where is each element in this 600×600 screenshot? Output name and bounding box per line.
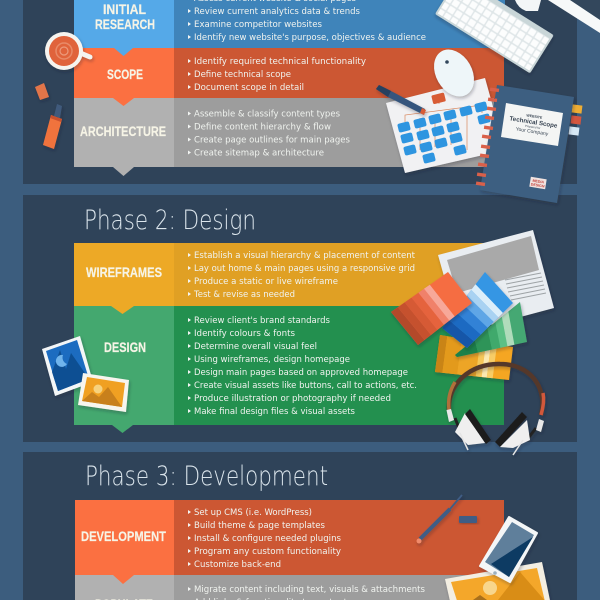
notebook tabs [569,104,582,136]
list: wireframe tasks: Establish a visual hierarchy & placement of content [194,251,416,261]
icon: usb drive [459,516,477,523]
list: architecture tasks: Assemble & classify content types [194,110,340,120]
notebook label: WEBSITE [526,113,543,120]
icon: eraser [35,83,49,100]
icon: blue swatch [442,272,513,348]
list: architecture tasks: Define content hierarchy & flow [194,122,331,132]
icon: orange landscape photo [78,373,129,412]
icon: wireframe sheet [438,230,554,333]
icon: headphones [446,364,544,455]
icon: pen [376,85,426,115]
heading: design: DESIGN [104,340,146,355]
icon: orange swatch [391,272,472,345]
row: development [75,500,504,575]
list: scope tasks: Define technical scope [194,70,291,80]
list: architecture tasks: Create sitemap & architecture [194,148,324,158]
list: development tasks [188,508,341,570]
list: development tasks: Set up CMS (i.e. WordPress) [194,508,312,518]
heading: phase 2: Phase 2: Design [84,205,256,236]
icon: coffee cup [45,32,90,70]
list: architecture tasks [188,110,350,158]
list: design tasks: Design main pages based on approved homepage [194,368,408,378]
notebook label [501,103,563,146]
icon: mouse [426,42,482,104]
heading: scope: SCOPE [107,67,143,82]
list: design tasks: Create visual assets like buttons, call to actions, etc. [194,381,417,391]
notebook stamp: DESIGN [530,182,545,189]
heading: development: DEVELOPMENT [81,529,167,544]
heading: initial research: INITIAL [103,2,146,17]
list: development tasks: Build theme & page templates [194,521,325,531]
icon: yellow swatch [435,335,513,380]
list: design tasks: Determine overall visual feel [194,342,317,352]
heading: wireframes: WIREFRAMES [86,265,162,280]
row: initial research [74,0,505,48]
list: design tasks: Make final design files & visual assets [194,407,355,417]
notebook spiral [476,87,499,186]
list: scope tasks: Identify required technical functionality [194,57,366,67]
notebook label: Prepared for [525,124,541,130]
icon: technical scope notebook [476,85,582,203]
row: wireframes [74,243,494,306]
icon: keyboard [435,0,554,73]
list: populate tasks: Migrate content including text, visuals & attachments [194,585,425,595]
notebook label: Technical Scope [509,115,558,130]
list: development tasks: Install & configure needed plugins [194,534,341,544]
list: design tasks [188,316,417,417]
list: research tasks: Review current analytics data & trends [194,7,360,17]
notebook stamp: MEDIA [532,179,545,184]
panel: phase 1 [23,0,577,184]
list: wireframe tasks: Lay out home & main pages using a responsive grid [194,264,415,274]
row: design [74,306,504,433]
list: design tasks: Review client's brand standards [194,316,330,326]
list: wireframe tasks: Test & revise as needed [193,290,295,300]
list: design tasks: Identify colours & fonts [194,329,295,339]
list: populate tasks [188,585,425,600]
list: research tasks [188,0,426,43]
list: design tasks: Produce illustration or photography if needed [194,394,391,404]
icon: green swatch [455,302,527,357]
list: architecture tasks: Create page outlines for main pages [194,136,350,146]
icon: smartphone [480,517,537,582]
list: wireframe tasks [188,251,416,300]
list: wireframe tasks: Produce a static or live wireframe [194,277,338,287]
list: design tasks: Using wireframes, design homepage [194,355,350,365]
heading: initial research: RESEARCH [95,17,155,32]
icon: monitor [515,0,600,33]
icon: landscape photo [445,562,552,600]
panel: phase 2 [23,195,577,442]
notebook label: Your Company [515,126,549,138]
row: populate [75,575,474,600]
row: architecture [74,98,494,176]
list: research tasks: Examine competitor websites [194,20,322,30]
list: research tasks: Identify new website's purpose, objectives & audience [194,33,426,43]
row: scope [74,48,504,98]
list: scope tasks: Document scope in detail [194,83,304,93]
list: scope tasks [188,57,366,93]
icon: org chart sheet [386,78,505,173]
notebook stamp [529,177,547,189]
panel: phase 3 [23,452,577,600]
icon: marker [43,104,62,149]
list: development tasks: Program any custom functionality [194,547,341,557]
heading: phase 3: Phase 3: Development [85,461,328,492]
icon: blue night photo [42,336,93,396]
icon: stylus pen [416,495,462,544]
list: development tasks: Customize back-end [194,560,281,570]
heading: architecture: ARCHITECTURE [80,124,166,139]
heading: initial research [95,2,155,32]
